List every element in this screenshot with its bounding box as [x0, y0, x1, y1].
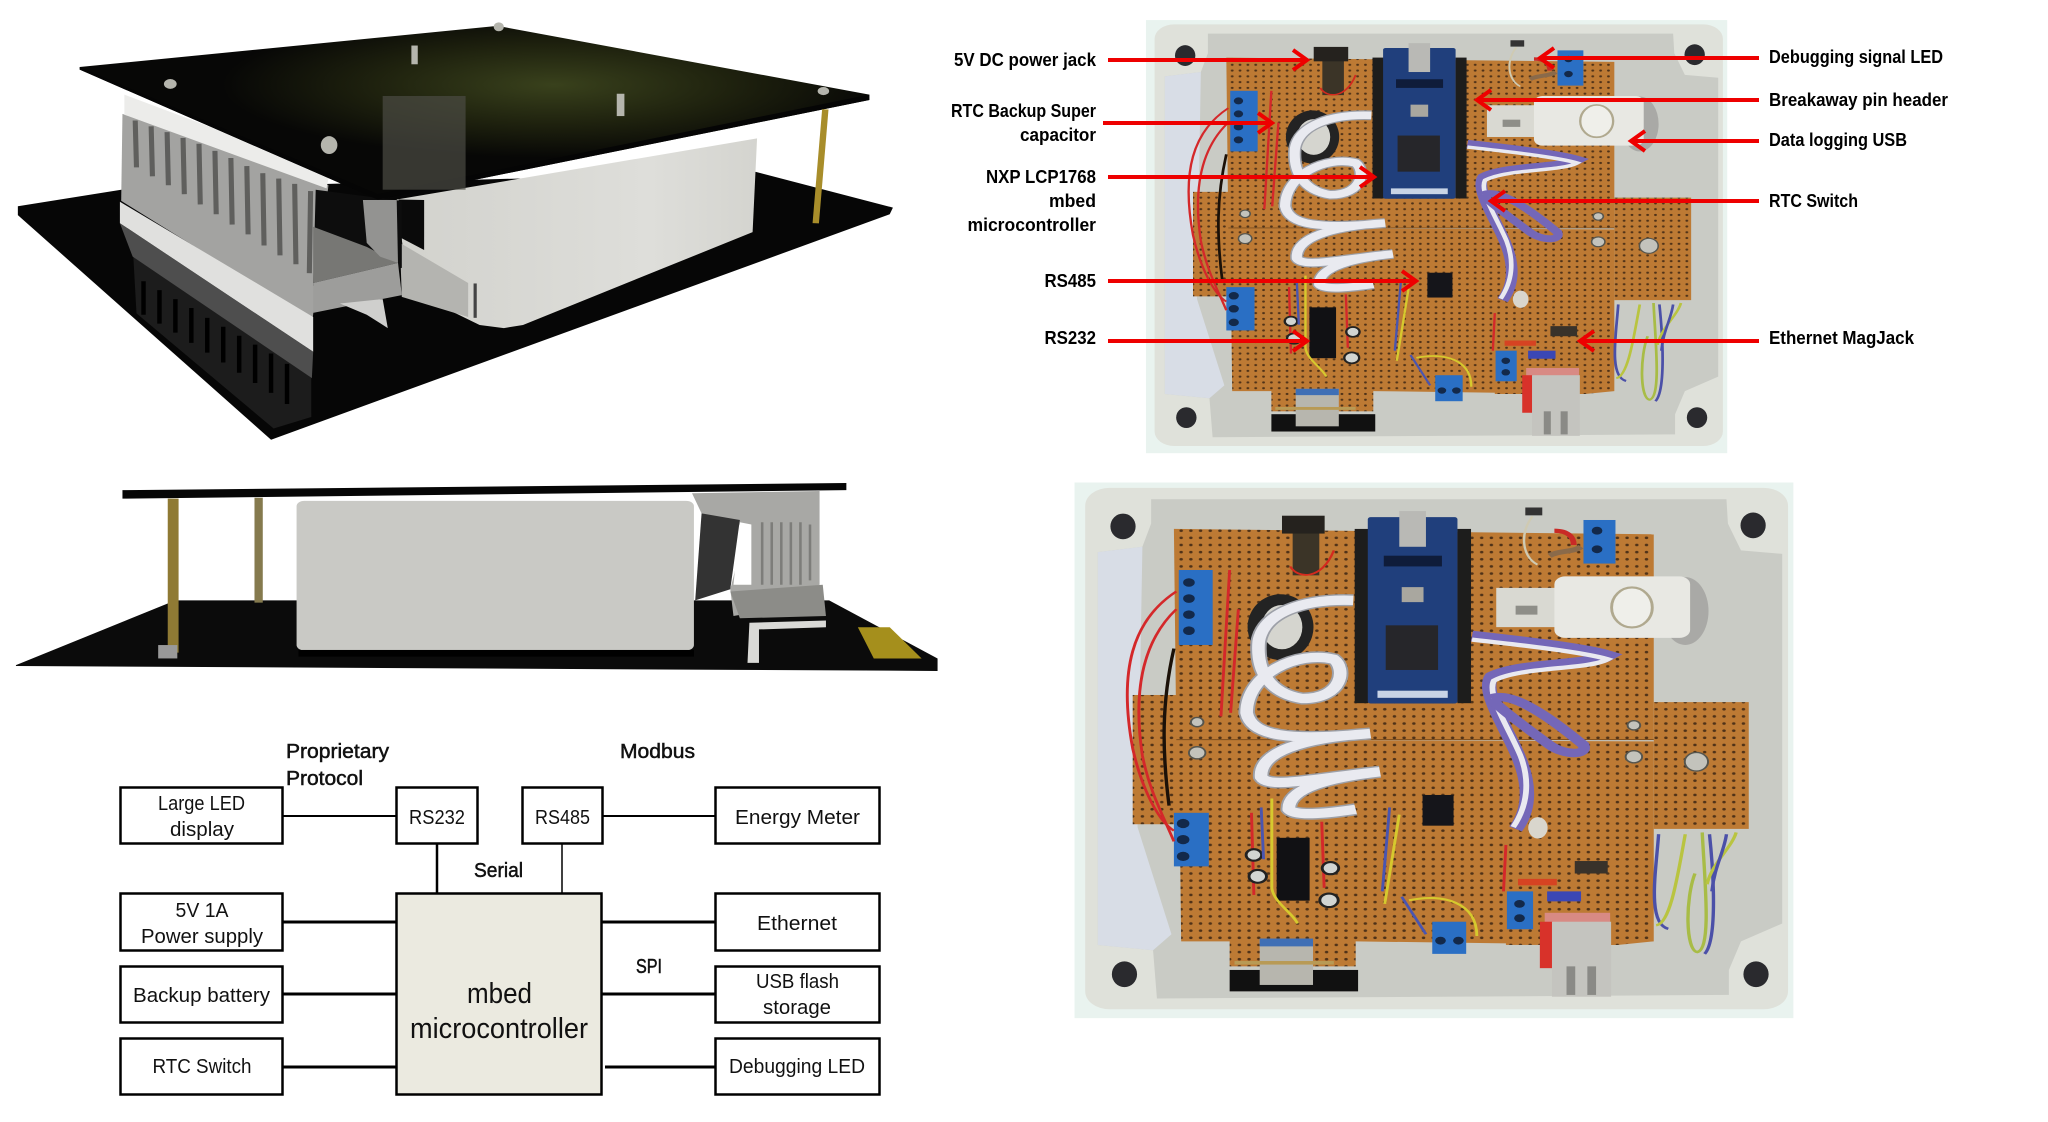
duct cover strip	[124, 95, 330, 188]
standoffs	[168, 499, 179, 653]
block: USB flash storage: USB flash	[756, 971, 839, 993]
block: debugging LED	[716, 1038, 880, 1094]
Ethernet MagJack	[1540, 913, 1611, 997]
photo: circuit board in enclosure, unannotated	[1075, 482, 1793, 1018]
block diagram	[120, 741, 880, 1094]
bottom plate	[18, 172, 893, 440]
block: power supply: 5V 1A	[176, 900, 229, 922]
label: NXP LCP1768 mbed microcontroller	[968, 167, 1096, 235]
block: power supply	[120, 894, 282, 950]
cable duct slots	[135, 121, 311, 273]
D-sub serial connector	[1230, 939, 1358, 991]
arrow: data logging USB	[1631, 131, 1759, 151]
capacitors	[1246, 849, 1339, 907]
label: Debugging signal LED: Debugging signal LED	[1769, 47, 1943, 67]
brass standoff	[816, 109, 825, 223]
label: NXP LCP1768 mbed microcontroller: microcontroller	[968, 215, 1096, 235]
USB flash drive	[1496, 576, 1690, 638]
block: mbed microcontroller: microcontroller	[410, 1013, 588, 1045]
plate reflection	[383, 96, 466, 190]
block: RS232	[396, 788, 478, 844]
cable duct end	[692, 491, 826, 663]
cable duct ribbed wall	[121, 114, 328, 320]
board mounting screws	[1189, 717, 1708, 771]
arrow: RS485	[1108, 271, 1416, 291]
label: Ethernet MagJack: Ethernet MagJack	[1769, 328, 1915, 348]
arrow: RS232	[1108, 331, 1307, 351]
label: RS485: RS485	[1044, 271, 1096, 291]
arrow: Ethernet MagJack	[1580, 331, 1759, 351]
block: ethernet	[716, 894, 880, 950]
round battery behind board	[1662, 577, 1709, 645]
block: power supply: Power supply	[141, 926, 263, 948]
arrow: RTC switch	[1491, 191, 1759, 211]
label: RTC Backup Super capacitor	[951, 101, 1096, 145]
protocol label: Modbus: Modbus	[620, 741, 695, 763]
protocol label: proprietary protocol: Protocol	[286, 768, 363, 790]
label: NXP LCP1768 mbed microcontroller: mbed	[1049, 191, 1096, 211]
block: USB flash storage: storage	[763, 997, 831, 1019]
photo: enclosure perspective view	[18, 22, 893, 440]
enclosure box	[297, 501, 694, 650]
block: backup battery: Backup battery	[133, 985, 270, 1007]
label: RTC Switch: RTC Switch	[1769, 191, 1858, 211]
label: Breakaway pin header: Breakaway pin header	[1769, 90, 1948, 110]
RS485 transceiver chip	[1423, 795, 1454, 826]
photo: circuit board in enclosure, annotated	[1146, 20, 1727, 453]
block: ethernet: Ethernet	[757, 913, 837, 935]
white ribbon cable coil	[1247, 600, 1380, 814]
terminal screws	[1177, 527, 1602, 945]
protocol label: SPI: SPI	[636, 956, 662, 978]
block: RS485: RS485	[535, 807, 590, 829]
mbed microcontroller module	[1355, 511, 1471, 704]
connection lines	[283, 816, 715, 1067]
block: energy meter: Energy Meter	[735, 807, 860, 829]
blue screw terminals	[1174, 520, 1615, 954]
block: RS232: RS232	[409, 807, 465, 829]
block: USB flash storage	[716, 966, 880, 1022]
arrow: debugging signal LED	[1540, 48, 1759, 68]
board seam	[1176, 738, 1654, 741]
arrow: 5V DC power jack	[1108, 50, 1307, 70]
label: RTC Backup Super capacitor: RTC Backup Super	[951, 101, 1096, 121]
arrow: RTC backup super capacitor	[1103, 113, 1272, 133]
protocol label: Serial: Serial	[474, 860, 523, 882]
enclosure cavity	[1098, 499, 1782, 999]
block: backup battery	[120, 966, 282, 1022]
block: RTC switch	[120, 1038, 282, 1094]
bottom plate	[16, 600, 938, 671]
block: debugging LED: Debugging LED	[729, 1056, 865, 1078]
LED and pin header	[1518, 817, 1608, 901]
red power wires	[1127, 570, 1506, 895]
RTC backup super capacitor	[1248, 594, 1313, 660]
block: RTC switch: RTC Switch	[152, 1056, 252, 1078]
block: energy meter	[716, 788, 880, 844]
slotted duct underside reflection	[133, 256, 311, 429]
debugging LED	[1524, 507, 1581, 565]
small jumper wires	[1261, 799, 1477, 936]
power input wires	[1654, 832, 1736, 954]
top plate	[122, 483, 846, 499]
photo: enclosure side view	[16, 483, 938, 671]
block: large LED display: Large LED	[158, 793, 245, 815]
block: mbed microcontroller: mbed	[467, 978, 532, 1010]
arrow: NXP LPC1768 mbed microcontroller	[1108, 167, 1374, 187]
label: RS232: RS232	[1044, 328, 1096, 348]
mounting holes	[1110, 512, 1769, 987]
top plate	[80, 26, 869, 200]
purple ribbon cable	[1472, 636, 1608, 829]
duct open end	[313, 190, 402, 286]
block: mbed microcontroller	[396, 894, 602, 1094]
lower white rail	[120, 202, 313, 352]
block: RS485	[522, 788, 602, 844]
label: Data logging USB: Data logging USB	[1769, 130, 1907, 150]
label: 5V DC power jack: 5V DC power jack	[954, 50, 1097, 70]
lower dark rail	[120, 223, 313, 378]
block: large LED display: display	[170, 819, 234, 841]
enclosure rim	[1085, 488, 1788, 1009]
enclosure box side	[397, 138, 757, 328]
perfboard	[1133, 529, 1749, 966]
barrel power jack	[1282, 516, 1334, 575]
label: NXP LCP1768 mbed microcontroller: NXP LCP1768	[986, 167, 1096, 187]
screws	[164, 22, 829, 154]
label: RTC Backup Super capacitor: capacitor	[1020, 125, 1096, 145]
protocol label: proprietary protocol: Proprietary	[286, 741, 389, 763]
protocol label: proprietary protocol	[286, 741, 389, 790]
photo background	[1075, 482, 1793, 1018]
block: large LED display	[120, 788, 282, 844]
arrow: breakaway pin header	[1477, 90, 1759, 110]
RS232 driver chip	[1277, 838, 1310, 901]
